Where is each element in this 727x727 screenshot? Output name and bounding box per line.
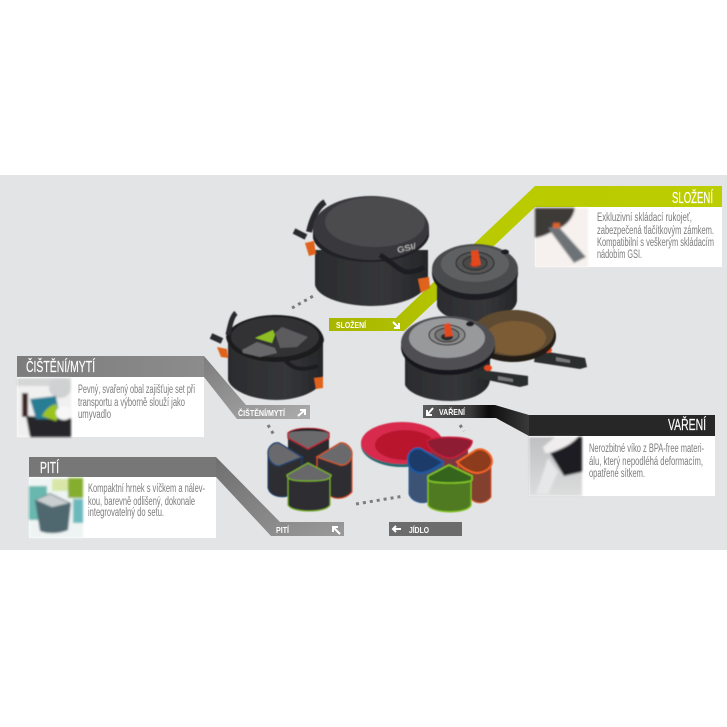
vaření connector ribbon and label <box>423 405 529 436</box>
pití photo: mug <box>29 478 83 538</box>
jídlo small label: JÍDLO <box>409 525 429 535</box>
pití description: kou, barevně odlišený, dokonale <box>88 496 195 508</box>
pití connector ribbon <box>216 457 344 536</box>
plates and translucent cups: food set <box>361 422 492 512</box>
body <box>315 250 428 306</box>
green cup compartment <box>255 330 275 343</box>
plate stack <box>361 422 443 467</box>
čištění small label: ČIŠTĚNÍ/MYTÍ <box>238 407 286 418</box>
frying pan <box>470 310 587 369</box>
knob <box>444 323 453 337</box>
green cup <box>287 463 331 511</box>
vaření small label: VAŘENÍ <box>439 406 466 417</box>
strap <box>283 358 318 369</box>
pot: back saucepan with lid <box>432 244 518 322</box>
left orange latch <box>305 241 316 256</box>
vaření description <box>589 443 704 480</box>
pití white box <box>29 477 216 538</box>
čištění heading band <box>17 356 204 377</box>
rings <box>456 252 494 274</box>
lid markings: GSI/ <box>396 241 418 255</box>
panel: pití <box>29 457 344 538</box>
grey compartments <box>242 342 277 357</box>
right orange latch <box>418 277 430 293</box>
blue cup <box>408 448 443 503</box>
složení small label: SLOŽENÍ <box>336 319 367 330</box>
složení photo: folding handle <box>535 208 588 267</box>
side handle strap <box>380 255 424 272</box>
background band <box>0 175 727 550</box>
vaření photo: lid strainer <box>529 437 582 496</box>
arrow: složení <box>393 322 399 328</box>
cups: drinking set <box>268 428 352 511</box>
panel: čištění/mytí <box>17 356 310 437</box>
čištění description <box>78 384 195 421</box>
čištění heading: ČIŠTĚNÍ/MYTÍ <box>26 357 95 376</box>
čištění description: transportu a výborně slouží jako <box>78 397 185 409</box>
panel: vaření <box>423 405 715 496</box>
pot: closed set (top) <box>294 196 430 306</box>
složení description <box>597 212 714 261</box>
orange cup <box>317 443 352 498</box>
dashes between stages <box>268 295 464 504</box>
čištění description: umyvadlo <box>78 409 111 421</box>
pití description <box>88 483 205 519</box>
pot: open with cups (left) <box>211 313 324 400</box>
label: jídlo <box>389 522 462 536</box>
čištění connector ribbon <box>204 356 310 419</box>
handle <box>474 369 528 387</box>
handle <box>228 313 236 335</box>
lid <box>313 196 429 260</box>
složení description: nádobím GSI. <box>597 249 642 261</box>
lid skirt <box>313 228 429 262</box>
arrow: pití <box>333 527 340 534</box>
čištění photo: washing bowl <box>17 378 72 437</box>
orange latches <box>217 347 228 358</box>
red cup <box>288 428 329 474</box>
složení white box <box>535 207 722 267</box>
arrow: čištění <box>298 410 305 416</box>
složení connector ribbon and heading band <box>329 186 722 331</box>
orange cup <box>457 449 492 503</box>
arrow: jídlo <box>393 526 401 532</box>
čištění white box <box>17 377 204 437</box>
pan handle <box>534 350 587 369</box>
vaření heading: VAŘENÍ <box>668 415 706 434</box>
blue cup <box>268 443 302 497</box>
pití heading: PITÍ <box>40 458 59 477</box>
red cup <box>427 437 472 473</box>
vaření heading band <box>529 415 715 436</box>
knob <box>471 250 481 266</box>
panel: složení <box>329 186 722 331</box>
vaření description: opatřené sítkem. <box>589 468 645 480</box>
left handle <box>309 202 325 232</box>
čištění description: Pevný, svařený obal zajišťuje set při <box>78 384 195 396</box>
pití description: Kompaktní hrnek s víčkem a nálev- <box>88 483 205 495</box>
green cup <box>428 465 472 512</box>
lid disc <box>325 197 425 247</box>
pití small label: PITÍ <box>276 525 290 535</box>
rings <box>429 325 465 345</box>
vaření white box <box>529 436 715 496</box>
pot: front saucepan with lid <box>401 316 528 401</box>
pití description: integrovatelný do setu. <box>88 507 164 519</box>
arrow: vaření <box>427 408 433 415</box>
pití heading band <box>29 457 216 477</box>
